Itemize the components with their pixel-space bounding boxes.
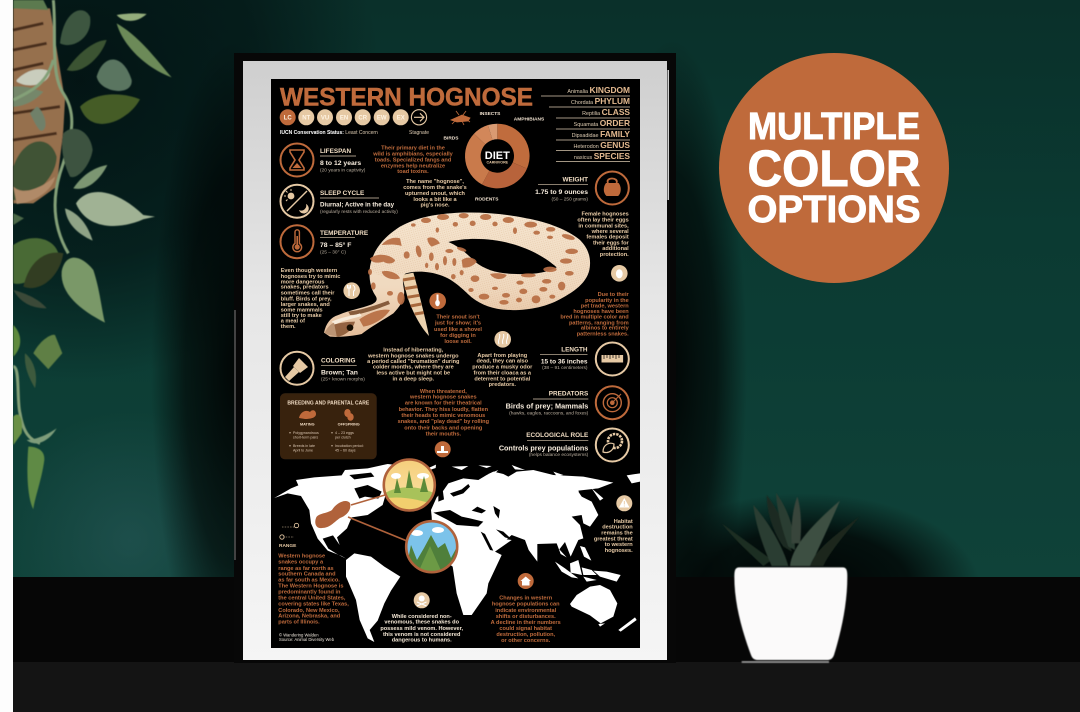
text: threatened behaviour: western hognose snakes — [409, 395, 477, 401]
text: name origin: The name "hognose", — [406, 179, 464, 185]
taxonomy classification list: nasicus SPECIES — [574, 151, 630, 161]
text: population changes: destruction, pollution, — [496, 632, 556, 638]
length block: LENGTH — [561, 346, 588, 354]
ecological role block: Controls prey populations — [499, 444, 588, 452]
lifespan block: LIFESPAN — [320, 148, 352, 155]
text: population changes: shifts or disturbances. — [496, 614, 556, 620]
text: brumation: western hognose snakes undergo — [367, 353, 459, 359]
icon: thermometer — [280, 225, 314, 258]
text: name origin: pig's nose. — [420, 202, 450, 208]
text: brumation: a period called "brumation" during — [367, 359, 460, 365]
text: primary diet: wild is amphibians, especially — [372, 152, 454, 158]
icon: warning — [616, 495, 632, 511]
icon: musk smell — [494, 331, 511, 348]
text: mimic defence: snakes, predators — [281, 285, 329, 291]
range label with icon — [279, 523, 299, 549]
color options badge: COLOR — [748, 140, 920, 197]
text: female hognoses: additional — [602, 246, 629, 252]
text: range description: southern Canada and — [278, 572, 336, 578]
coloring block — [280, 352, 365, 385]
text: mimic defence: them. — [281, 324, 296, 330]
text: brumation — [367, 347, 460, 382]
credits — [279, 632, 335, 642]
weight block: WEIGHT — [562, 176, 588, 184]
white mat — [243, 61, 667, 660]
text: habitat destruction: Habitat — [614, 519, 633, 525]
icon: house — [518, 573, 534, 589]
text: mild venom: dangerous to humans. — [392, 638, 452, 644]
basket — [13, 8, 65, 203]
text: pet trade morphs: hognoses have been — [573, 309, 629, 315]
text: musky odor: from their cloaca as a — [474, 370, 532, 376]
text: range description — [278, 554, 349, 626]
text: range description: predominantly found in — [278, 590, 341, 596]
temperature block: (25 – 30° C) — [320, 250, 346, 256]
text: threatened behaviour: snakes, and "play dead" by rolling — [398, 419, 490, 425]
taxonomy classification list: Animalia KINGDOM — [567, 85, 630, 95]
range area on map — [315, 501, 350, 528]
diet labels: RODENTS — [475, 196, 499, 202]
text: name origin: upturned snout, which — [405, 191, 466, 197]
length block: 15 to 36 inches — [541, 358, 588, 366]
icon: eggs — [344, 409, 354, 421]
text: pet trade morphs: pet trade, western — [581, 304, 629, 310]
icon: mating snakes — [299, 410, 316, 419]
text: pet trade morphs — [560, 292, 630, 337]
icon: shovel — [429, 293, 446, 309]
text: snout shovel: for digging in — [440, 333, 476, 339]
shadow right of frame — [597, 40, 747, 580]
americas — [274, 464, 436, 642]
range label with icon: RANGE — [279, 543, 297, 549]
breeding and parental care panel: MATING — [300, 422, 315, 426]
text: threatened behaviour: behavior. They hiss loudly, flatten — [399, 407, 489, 413]
color options badge: MULTIPLE — [748, 106, 920, 148]
text: female hognoses: often lay their eggs — [577, 218, 629, 224]
text: range description: Colorado, New Mexico, — [278, 608, 340, 614]
text: habitat destruction: hognoses. — [605, 548, 633, 554]
connector: range to prairie — [351, 495, 385, 505]
breeding and parental care panel: Polygynandrous — [293, 431, 319, 435]
ecological role block: (helps balance ecosystems) — [529, 452, 589, 458]
poster — [271, 79, 640, 648]
text: mimic defence — [281, 268, 340, 330]
text: female hognoses — [577, 212, 630, 258]
text: brumation: in a deep sleep. — [392, 376, 435, 382]
text: mimic defence: still try to make — [281, 313, 322, 319]
text: brumation: colder months, where they are — [373, 365, 454, 371]
text: pet trade morphs: patternless snakes. — [577, 331, 629, 337]
ecological role block: ECOLOGICAL ROLE — [526, 432, 589, 439]
IUCN status circles: EW — [377, 116, 387, 122]
text: habitat destruction: remains the — [601, 530, 633, 536]
snake illustration — [324, 213, 590, 337]
text: female hognoses: Female hognoses — [581, 212, 629, 218]
color options badge: OPTIONS — [748, 189, 920, 231]
diet labels: AMPHIBIANS — [514, 116, 545, 122]
length block — [540, 342, 629, 376]
eurasia and africa — [431, 465, 640, 632]
IUCN status circles: VU — [321, 116, 329, 122]
icon: egg — [611, 265, 628, 282]
icon: playing dead snake — [435, 441, 451, 457]
text: pet trade morphs: bred in multiple color and — [560, 315, 629, 321]
breeding and parental care panel — [280, 393, 377, 459]
coloring block: COLORING — [321, 358, 355, 364]
text: musky odor — [472, 353, 533, 388]
hanging plant — [13, 0, 172, 509]
text: threatened behaviour: When threatened, — [420, 389, 467, 395]
text: mimic defence: Even though western — [281, 268, 338, 274]
breeding and parental care panel: April to June — [293, 448, 313, 452]
text: population changes: A decline in their numbers — [491, 620, 561, 626]
text: primary diet: toad toxins. — [397, 169, 429, 175]
predators block: Birds of prey; Mammals — [506, 402, 588, 410]
pot base reflection — [742, 661, 829, 663]
text: mimic defence: hognoses try to mimic — [281, 274, 340, 280]
icon: gear and leaf — [596, 428, 629, 462]
text: name origin — [403, 179, 467, 208]
credits: Source: Animal Diversity Web — [279, 637, 335, 642]
sleep cycle block: Diurnal; Active in the day — [320, 202, 395, 208]
islands — [452, 465, 640, 483]
text: musky odor: deterrent to potential — [474, 376, 531, 382]
picture frame — [234, 53, 676, 663]
text: snout shovel: just for show; it's — [434, 321, 481, 327]
IUCN status circles: CR — [358, 116, 368, 122]
text: mild venom: venomous, these snakes do — [384, 620, 460, 626]
text: name origin: comes from the snake's — [403, 185, 467, 191]
diet labels: INSECTS — [480, 111, 501, 117]
text: mimic defence: a meal of — [281, 319, 305, 325]
text: range description: Western hognose — [278, 554, 325, 560]
weight block: (50 – 250 grams) — [551, 196, 588, 202]
text: pet trade morphs: popularity in the — [585, 298, 629, 304]
text: threatened behaviour: their mouths. — [426, 432, 461, 438]
diet donut chart: DIET — [485, 150, 510, 162]
breeding and parental care panel: 4 – 23 eggs — [335, 431, 354, 435]
icon: skull — [414, 592, 430, 608]
sleep cycle block: (regularly rests with reduced activity) — [320, 209, 398, 215]
shadow behind pot on wall — [630, 490, 980, 585]
text: pet trade morphs: albinos to entirely — [581, 326, 630, 332]
IUCN status circles: NT — [302, 116, 311, 122]
snake markings — [325, 213, 578, 337]
IUCN status circles — [280, 109, 409, 125]
text: musky odor: dead, they can also — [476, 359, 529, 365]
habitat circle: forest — [405, 520, 459, 575]
lighter wall patch lower left — [0, 410, 260, 580]
lifespan block: (20 years in captivity) — [320, 168, 366, 174]
taxonomy classification list: Heterodon GENUS — [574, 140, 630, 150]
text: population changes: or other concerns. — [501, 638, 551, 644]
text: habitat destruction: greatest threat — [594, 536, 633, 542]
text: mimic defence: bluff. Birds of prey, — [281, 296, 332, 302]
aloe plant — [722, 493, 859, 566]
text: name origin: looks a bit like a — [413, 197, 457, 203]
IUCN status circles: LC — [284, 116, 292, 122]
icon: sun and moon — [280, 185, 314, 218]
breeding and parental care panel: OFFSPRING — [338, 422, 360, 426]
IUCN status circles: EN — [340, 116, 348, 122]
text: musky odor: Apart from playing — [477, 353, 528, 359]
icon: kettlebell — [596, 172, 629, 204]
text: mimic defence: more dangerous — [281, 280, 325, 286]
snake eye — [347, 324, 353, 331]
dark corner behind plant — [0, 0, 400, 400]
icon: ruler — [596, 342, 629, 376]
sleep cycle block: SLEEP CYCLE — [320, 190, 365, 197]
text: population changes — [491, 596, 561, 644]
diet donut chart — [465, 124, 530, 188]
text: musky odor: produce a musky odor — [472, 365, 533, 371]
habitat circle: prairie — [383, 459, 436, 511]
credits: © Wandering Walden — [279, 632, 319, 638]
diet labels — [444, 111, 545, 202]
icon: hourglass — [280, 144, 314, 176]
diet donut chart: CARNIVORE — [487, 160, 509, 164]
text: range description: range as far north as — [278, 566, 334, 572]
weight block: 1.75 to 9 ounces — [535, 189, 588, 196]
text: brumation: less active but might not be — [376, 371, 450, 377]
breeding and parental care panel: 45 – 60 days — [335, 448, 356, 452]
temperature block: TEMPERATURE — [320, 230, 369, 237]
icon: fork and knife — [343, 282, 360, 299]
text: population changes: Changes in western — [499, 596, 553, 602]
text: pet trade morphs: Due to their — [598, 292, 630, 298]
text: female hognoses: in communal sites, — [578, 224, 629, 230]
text: habitat destruction: to western — [605, 542, 633, 548]
ecological role block — [499, 428, 629, 462]
text: threatened behaviour: their heads to mimic venomous — [401, 413, 485, 419]
sleep cycle block — [280, 185, 398, 218]
shelf — [13, 577, 1080, 712]
connector: range to forest — [348, 517, 407, 541]
conservation status text: IUCN Conservation Status: Least Concern — [280, 130, 378, 136]
icon: stagnate arrow — [411, 110, 427, 125]
text: female hognoses: their eggs for — [593, 240, 630, 246]
text: mild venom — [380, 614, 463, 644]
text: range description: Arizona, Nebraska, and — [278, 614, 341, 620]
seas — [433, 484, 602, 551]
coloring block: Brown; Tan — [321, 370, 358, 376]
text: range description: parts of Illinois. — [278, 620, 320, 626]
text: mild venom: possess mild venom. However, — [380, 626, 463, 632]
lifespan block: 8 to 12 years — [320, 160, 361, 167]
predators block — [506, 386, 629, 419]
text: threatened behaviour: onto their backs and opening — [404, 425, 483, 431]
text: primary diet: enzymes help neutralize — [381, 164, 445, 170]
text: snout shovel: loose soil. — [444, 339, 472, 345]
text: range description: snakes occupy a — [278, 560, 324, 566]
white strip at left edge — [0, 0, 13, 712]
text: female hognoses: where several — [591, 229, 629, 235]
frame highlight — [668, 70, 669, 200]
text: snout shovel: Their snout isn't — [436, 315, 480, 321]
diet labels: BIRDS — [444, 136, 459, 142]
taxonomy classification list: Squamata ORDER — [574, 118, 630, 128]
lifespan block — [280, 144, 366, 176]
text: brumation: Instead of hibernating, — [383, 347, 444, 353]
shadow left of frame — [150, 40, 325, 580]
text: primary diet: Their primary diet in the — [381, 146, 445, 152]
snake tail — [402, 273, 429, 336]
text: habitat destruction: destruction — [602, 524, 633, 530]
snake body and head — [324, 213, 590, 337]
text: population changes: could signal habitat — [499, 626, 552, 632]
white pot — [734, 567, 847, 660]
length block: (38 – 91 centimeters) — [542, 365, 588, 371]
text: range description: The Western Hognose is — [278, 584, 343, 590]
text: female hognoses: females deposit — [586, 234, 629, 240]
temperature block: 78 – 85° F — [320, 241, 351, 249]
text: population changes: indicate environmental — [495, 608, 557, 614]
text: primary diet — [372, 146, 454, 175]
stagnate label: Stagnate — [409, 130, 429, 136]
taxonomy classification list: Chordata PHYLUM — [571, 96, 630, 106]
text: primary diet: toads. Specialized fangs and — [375, 158, 452, 164]
text: population changes: hognose populations can — [492, 602, 560, 608]
text: habitat destruction — [594, 519, 633, 554]
predators block: PREDATORS — [549, 390, 589, 398]
text: range description: the central United States, — [278, 596, 346, 602]
text: range description: as far south as Mexico. — [278, 578, 340, 584]
taxonomy classification list: Dipsadidae FAMILY — [572, 129, 630, 139]
temperature block — [280, 225, 369, 258]
breeding and parental care panel: per clutch — [335, 436, 351, 440]
world map — [274, 464, 640, 642]
potted plant — [722, 493, 859, 663]
text: mimic defence: some mammals — [281, 307, 323, 313]
text: range description: covering states like Texas, — [278, 602, 349, 608]
text: threatened behaviour — [398, 389, 490, 438]
taxonomy classification list — [541, 85, 630, 162]
text: mimic defence: larger snakes, and — [281, 302, 330, 308]
title: WESTERN HOGNOSE — [280, 84, 533, 112]
text: female hognoses: protection. — [600, 252, 629, 258]
text: threatened behaviour: are known for their theatrical — [405, 401, 482, 407]
predators block: (hawks, eagles, raccoons, and foxes) — [509, 410, 589, 416]
text: mimic defence: sometimes call their — [281, 290, 335, 296]
breeding and parental care panel: Incubation period: — [335, 444, 364, 448]
weight block — [535, 172, 629, 204]
breeding and parental care panel: short-term pairs — [293, 436, 318, 440]
text: mild venom: this venom is not considered — [383, 632, 461, 638]
breeding and parental care panel: Breeds in late — [293, 444, 315, 448]
text: snout shovel: used like a shovel — [434, 327, 482, 333]
color options badge — [719, 53, 949, 283]
breeding and parental care panel: BREEDING AND PARENTAL CARE — [287, 400, 370, 406]
text: mild venom: While considered non- — [392, 614, 452, 620]
IUCN status circles: EX — [397, 116, 405, 122]
icon: grasshopper — [451, 111, 470, 125]
taxonomy classification list: Reptilia CLASS — [582, 107, 630, 117]
icon: target — [596, 386, 629, 419]
icon: paint brush — [280, 352, 314, 385]
text: snout shovel — [434, 315, 482, 345]
text: pet trade morphs: patterns, ranging from — [569, 320, 629, 326]
coloring block: (25+ known morphs) — [321, 376, 365, 382]
text: musky odor: predators. — [489, 382, 516, 388]
